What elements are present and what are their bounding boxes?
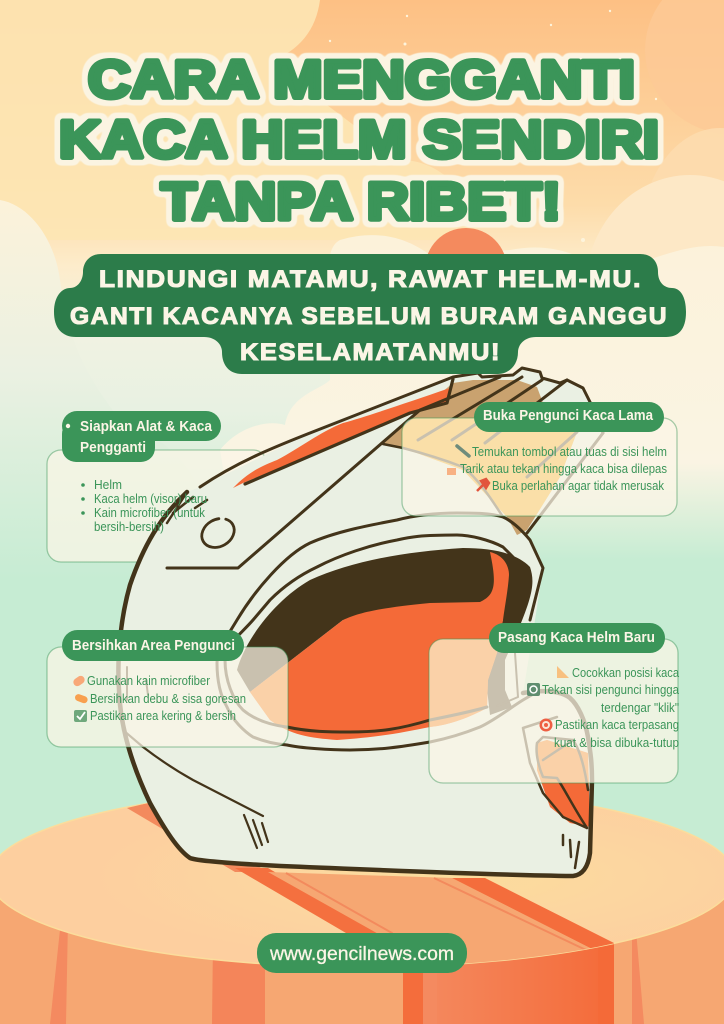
- heading pill: Pengganti: [80, 440, 146, 456]
- title: [59, 50, 659, 232]
- panel: siapkan alat background: [47, 450, 267, 562]
- heading pill: [62, 411, 221, 462]
- icon: ruler: [557, 666, 569, 678]
- checklist: Kaca helm (visor) baru: [94, 492, 207, 506]
- orange lining: [250, 552, 509, 740]
- panel: bersihkan area pengunci: Gunakan kain microfiber: [87, 674, 210, 688]
- title: TANPA RIBET!: [161, 172, 561, 232]
- helmet outlines: [118, 368, 603, 876]
- panel: pasang kaca helm baru: [429, 623, 679, 783]
- panel: buka pengunci kaca lama: Temukan tombol atau tuas di sisi helm: [472, 445, 667, 459]
- checklist: [81, 478, 207, 534]
- icon: sponge: [74, 693, 89, 704]
- icon: soap: [72, 674, 86, 688]
- rear vent: [537, 740, 590, 827]
- icon: wrench: [457, 446, 469, 456]
- icon: pin: [477, 479, 489, 491]
- panel: pasang kaca helm baru: kuat & bisa dibuka-tutup: [554, 736, 679, 750]
- panel: pasang kaca helm baru: terdengar "klik": [601, 701, 679, 715]
- sun: [425, 228, 507, 310]
- helmet interior: [237, 548, 532, 715]
- helmet shell fill: [118, 368, 603, 876]
- panel: bersihkan area pengunci: Pastikan area kering & bersih: [90, 709, 236, 723]
- subtitle banner: KESELAMATANMU!: [240, 339, 501, 366]
- panel: bersihkan area pengunci: [47, 630, 288, 747]
- heading pill: [489, 623, 665, 653]
- title: CARA MENGGANTI: [88, 50, 635, 110]
- subtitle banner: LINDUNGI MATAMU, RAWAT HELM-MU.: [99, 266, 642, 293]
- heading pill: [474, 402, 664, 432]
- helmet illustration: [118, 368, 603, 876]
- heading pill: Buka Pengunci Kaca Lama: [483, 408, 654, 424]
- orange visor stripe: [233, 388, 450, 488]
- helmet button: [197, 513, 239, 553]
- icon: check box: [74, 710, 87, 722]
- checklist: Helm: [94, 478, 122, 492]
- panel: bersihkan area pengunci: Bersihkan debu & sisa goresan: [90, 692, 246, 706]
- tint seen through the panels: [250, 418, 589, 783]
- visor glass: [380, 380, 577, 535]
- panel: buka pengunci kaca lama: Tarik atau tekan hingga kaca bisa dilepas: [460, 462, 667, 476]
- checklist: bersih-bersih): [94, 520, 164, 534]
- table straps: [127, 803, 614, 980]
- subtitle banner: GANTI KACANYA SEBELUM BURAM GANGGU: [70, 303, 668, 330]
- panel: buka pengunci kaca lama: Buka perlahan agar tidak merusak: [492, 479, 665, 493]
- heading pill: Siapkan Alat & Kaca: [80, 419, 213, 435]
- panel: pasang kaca helm baru: Pastikan kaca terpasang: [555, 718, 679, 732]
- panel: pasang kaca helm baru: Tekan sisi pengunci hingga: [542, 683, 679, 697]
- panel: siapkan alat dan kaca pengganti: [62, 411, 221, 534]
- website footer pill: www.gencilnews.com: [269, 944, 454, 965]
- checklist: Kain microfiber (untuk: [94, 506, 206, 520]
- heading pill: [62, 630, 244, 661]
- subtitle banner: [54, 254, 686, 374]
- icon: refresh: [527, 683, 540, 696]
- table: [0, 787, 724, 1024]
- website footer pill: [257, 933, 467, 973]
- icon: orange square: [447, 468, 456, 475]
- heading pill: Bersihkan Area Pengunci: [72, 638, 235, 654]
- stars: [329, 10, 657, 242]
- title: KACA HELM SENDIRI: [59, 110, 659, 170]
- left cloud: [0, 200, 225, 580]
- right cloud: [220, 235, 724, 570]
- heading pill: Pasang Kaca Helm Baru: [498, 630, 655, 646]
- panel: pasang kaca helm baru: Cocokkan posisi kaca: [572, 666, 679, 680]
- panel: buka pengunci kaca lama: [402, 402, 677, 516]
- icon: target: [540, 718, 552, 732]
